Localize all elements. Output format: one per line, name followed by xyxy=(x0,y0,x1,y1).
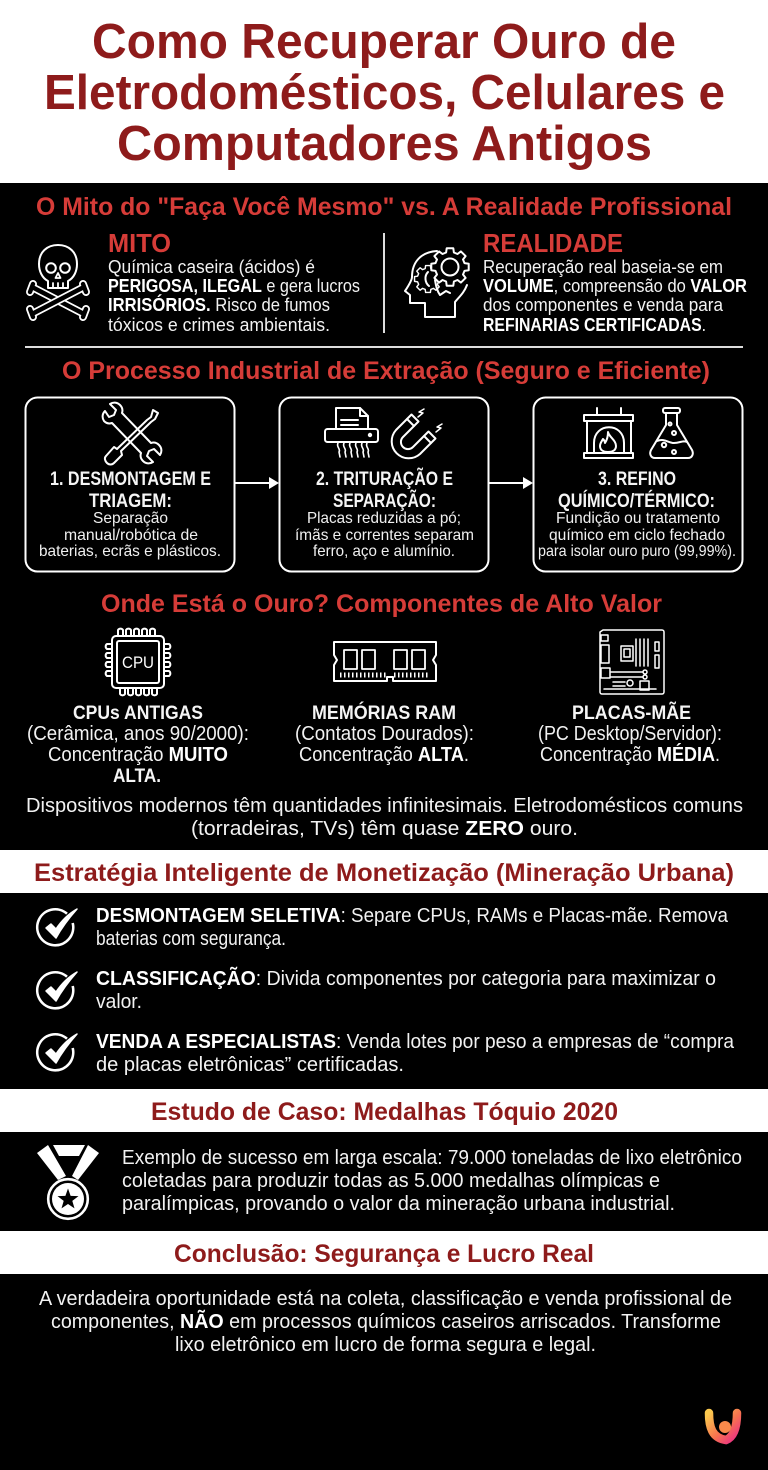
text block: conclusion xyxy=(39,1287,732,1356)
panel: step 2: 2. TRITURAÇÃO E xyxy=(316,468,453,490)
panel: myth: IRRISÓRIOS. Risco de fumos xyxy=(108,294,330,315)
panel: step 2 xyxy=(280,398,488,572)
heading: monetization strategy: Estratégia Inteligente de Monetização (Mineração Urbana) xyxy=(34,859,734,887)
panel: step 2: Placas reduzidas a pó; xyxy=(307,510,461,527)
panel: classification: CLASSIFICAÇÃO: Divida componentes por categoria para maximizar o xyxy=(96,967,716,990)
panel: step 1 xyxy=(26,398,234,572)
panel: myth: MITO xyxy=(108,228,171,258)
panel: step 2: SEPARAÇÃO: xyxy=(333,490,436,512)
panel: motherboard: PLACAS-MÃE xyxy=(572,702,691,724)
panel: sale to specialists xyxy=(37,1030,735,1076)
icon: motherboard xyxy=(600,630,664,694)
icon: CPU chip xyxy=(106,629,170,695)
panel: step 1: 1. DESMONTAGEM E xyxy=(50,469,211,490)
icon: head with gears xyxy=(405,248,469,317)
panel: case study xyxy=(37,1145,742,1219)
panel: classification: valor. xyxy=(96,990,142,1013)
panel: CPUs: ALTA. xyxy=(113,766,161,787)
title banner: Eletrodomésticos, Celulares e xyxy=(44,66,725,120)
panel: motherboard xyxy=(538,630,722,766)
icon: CPU chip: CPU xyxy=(122,653,154,672)
heading: myth vs reality: O Mito do "Faça Você Mesmo" vs. A Realidade Profissional xyxy=(36,193,732,221)
icon: magnet xyxy=(392,409,442,458)
panel: step 3: QUÍMICO/TÉRMICO: xyxy=(558,490,715,512)
panel: reality: dos componentes e venda para xyxy=(483,294,724,315)
panel: motherboard: Concentração MÉDIA. xyxy=(540,743,720,766)
panel: step 3 xyxy=(534,398,742,572)
panel: RAM: (Contatos Dourados): xyxy=(295,722,474,745)
panel: myth xyxy=(30,228,360,335)
icon: skull and crossbones xyxy=(30,245,86,317)
heading: case study xyxy=(0,1089,768,1132)
panel: step 1: manual/robótica de xyxy=(64,527,198,544)
panel: classification xyxy=(37,967,716,1013)
icon: shredder xyxy=(325,408,378,457)
icon: medal xyxy=(37,1145,99,1219)
panel: reality: VOLUME, compreensão do VALOR xyxy=(483,275,747,296)
text block: conclusion: lixo eletrônico em lucro de forma segura e legal. xyxy=(175,1333,596,1356)
arrow: step 2 to 3 xyxy=(489,477,533,489)
text block: modern devices note: (torradeiras, TVs) têm quase ZERO ouro. xyxy=(191,817,578,840)
panel: sale to specialists: VENDA A ESPECIALISTAS: Venda lotes por peso a empresas de “compra xyxy=(96,1030,735,1053)
icon: check xyxy=(37,1034,77,1070)
text block: conclusion: componentes, NÃO em processos químicos caseiros arriscados. Transforme xyxy=(51,1310,721,1333)
icon: check xyxy=(37,909,77,945)
panel: CPUs xyxy=(27,629,249,787)
heading: conclusion xyxy=(0,1231,768,1274)
panel: step 3: Fundição ou tratamento xyxy=(556,510,720,527)
panel: myth: Química caseira (ácidos) é xyxy=(108,256,315,277)
panel: step 1: Separação xyxy=(93,510,168,527)
panel: selective disassembly: baterias com segurança. xyxy=(96,927,286,950)
logo xyxy=(709,1413,737,1440)
heading: case study: Estudo de Caso: Medalhas Tóquio 2020 xyxy=(151,1098,618,1126)
panel: RAM: MEMÓRIAS RAM xyxy=(312,702,456,724)
heading: where is the gold: Onde Está o Ouro? Componentes de Alto Valor xyxy=(101,590,662,618)
panel: selective disassembly: DESMONTAGEM SELETIVA: Separe CPUs, RAMs e Placas-mãe. Remova xyxy=(96,904,729,927)
icon: check xyxy=(37,972,77,1008)
panel: step 1: TRIAGEM: xyxy=(89,491,172,512)
panel: step 1: baterias, ecrãs e plásticos. xyxy=(39,543,221,560)
heading: monetization strategy xyxy=(0,850,768,893)
text block: modern devices note xyxy=(26,794,743,840)
panel: RAM xyxy=(295,642,474,766)
panel: step 3: para isolar ouro puro (99,99%). xyxy=(538,543,736,560)
icon: wrench and screwdriver xyxy=(103,403,161,464)
panel: step 2: ímãs e correntes separam xyxy=(295,527,474,544)
panel: step 2: ferro, aço e alumínio. xyxy=(313,543,455,560)
panel: motherboard: (PC Desktop/Servidor): xyxy=(538,722,722,745)
panel: case study: paralímpicas, provando o valor da mineração urbana industrial. xyxy=(122,1192,675,1215)
panel: step 3: químico em ciclo fechado xyxy=(549,527,725,544)
panel: selective disassembly xyxy=(37,904,729,950)
panel: CPUs: CPUs ANTIGAS xyxy=(73,703,203,724)
text block: conclusion: A verdadeira oportunidade está na coleta, classificação e venda profissional de xyxy=(39,1287,732,1310)
title banner: Computadores Antigos xyxy=(117,117,652,171)
icon: RAM module xyxy=(334,642,436,681)
heading: industrial process: O Processo Industrial de Extração (Seguro e Eficiente) xyxy=(62,357,710,385)
panel: case study: coletadas para produzir todas as 5.000 medalhas olímpicas e xyxy=(122,1169,660,1192)
panel: step 3: 3. REFINO xyxy=(598,469,676,490)
panel: myth: tóxicos e crimes ambientais. xyxy=(108,314,330,335)
panel: reality xyxy=(405,228,747,335)
panel: reality: Recuperação real baseia-se em xyxy=(483,256,723,277)
panel: myth: PERIGOSA, ILEGAL e gera lucros xyxy=(108,275,360,296)
title banner: Como Recuperar Ouro de xyxy=(92,15,676,69)
panel: CPUs: Concentração MUITO xyxy=(48,743,228,766)
icon: furnace xyxy=(584,408,633,458)
panel: RAM: Concentração ALTA. xyxy=(299,743,469,766)
text block: modern devices note: Dispositivos modernos têm quantidades infinitesimais. Eletrodomésticos comuns xyxy=(26,794,743,817)
panel: sale to specialists: de placas eletrônicas” certificadas. xyxy=(96,1053,404,1076)
panel: reality: REFINARIAS CERTIFICADAS. xyxy=(483,314,706,335)
title banner xyxy=(0,0,768,183)
heading: conclusion: Conclusão: Segurança e Lucro Real xyxy=(174,1240,594,1268)
panel: CPUs: (Cerâmica, anos 90/2000): xyxy=(27,722,249,745)
panel: reality: REALIDADE xyxy=(483,228,623,258)
icon: flask xyxy=(650,408,693,458)
arrow: step 1 to 2 xyxy=(235,477,279,489)
